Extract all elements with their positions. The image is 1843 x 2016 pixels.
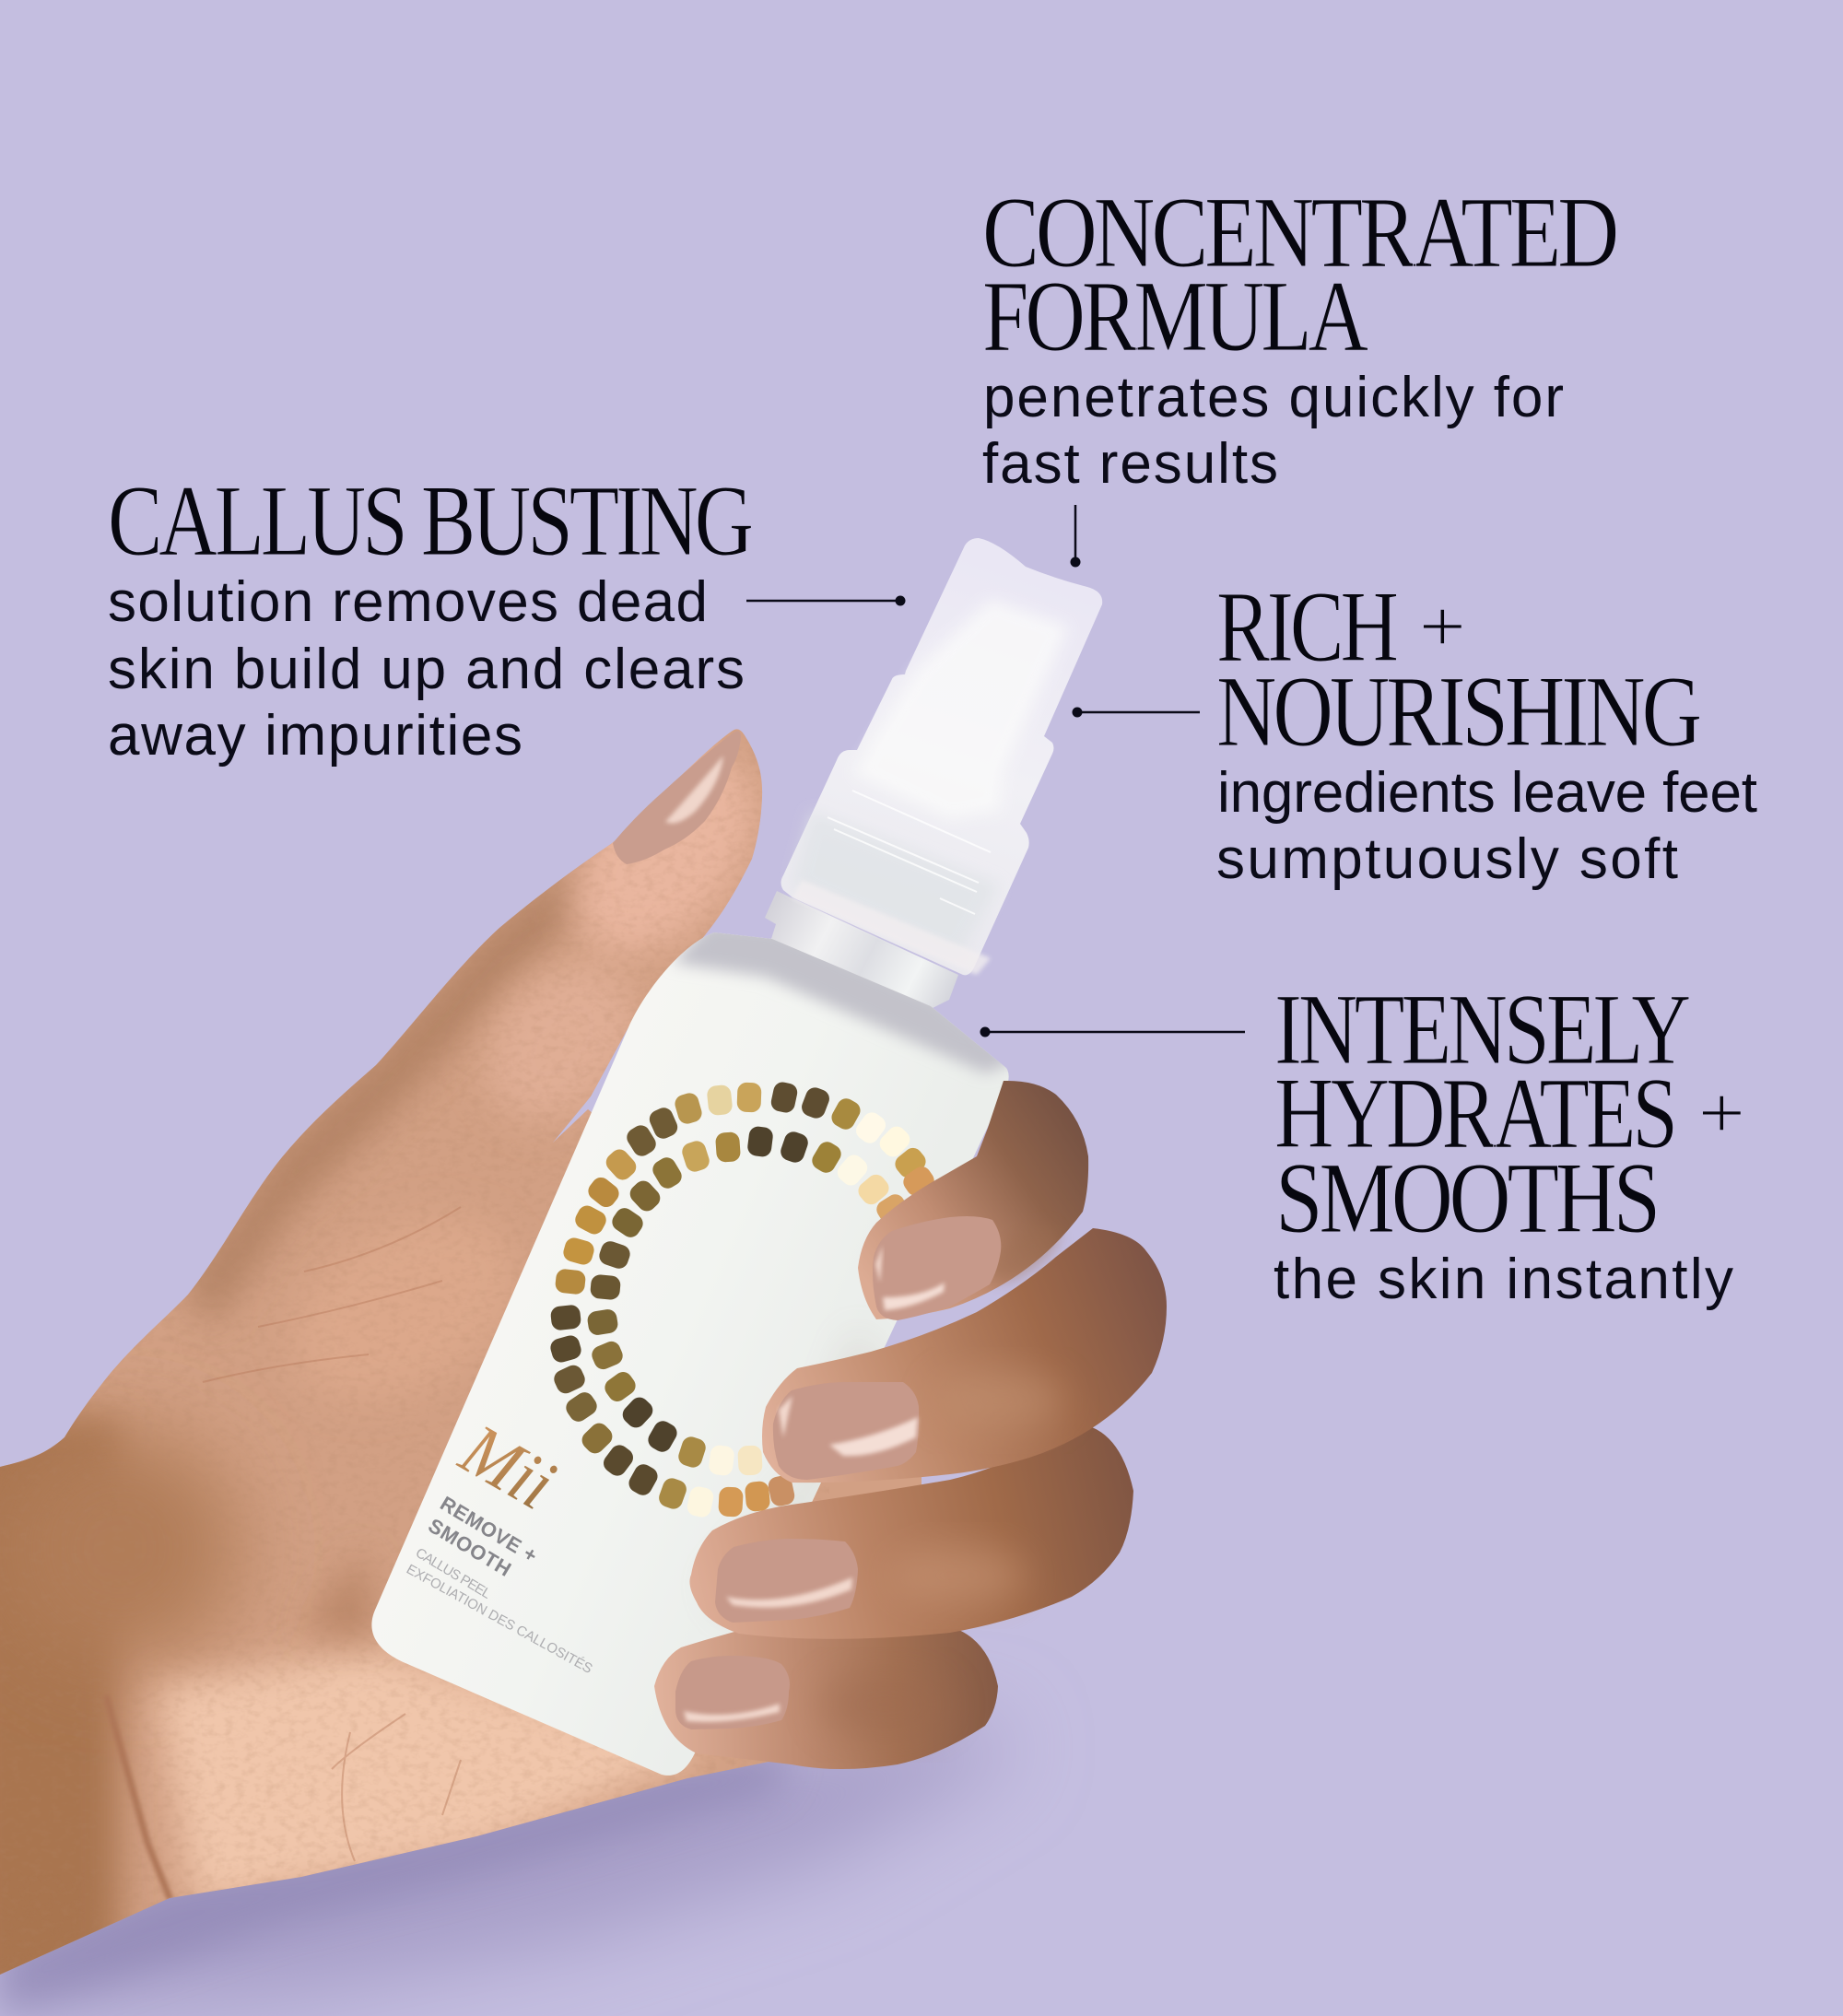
description: fast results bbox=[982, 432, 1278, 496]
description bbox=[108, 570, 745, 768]
heading: INTENSELY bbox=[1274, 973, 1689, 1085]
brand logo: Mii bbox=[447, 1409, 569, 1526]
heading: FORMULA bbox=[982, 260, 1368, 372]
description: ingredients leave feet bbox=[1217, 761, 1757, 825]
description: skin build up and clears bbox=[108, 638, 745, 701]
nail bbox=[675, 1656, 790, 1729]
heading: + bbox=[1419, 587, 1462, 668]
callout: callus busting bbox=[108, 464, 905, 768]
heading: + bbox=[1698, 1073, 1742, 1155]
description: solution removes dead bbox=[108, 570, 708, 634]
product name: REMOVE + bbox=[436, 1492, 541, 1567]
product descriptor: EXFOLIATION DES CALLOSITÉS bbox=[404, 1562, 595, 1677]
callout: concentrated formula bbox=[982, 176, 1616, 568]
nail bbox=[873, 1216, 1001, 1320]
heading: HYDRATES bbox=[1274, 1057, 1674, 1169]
heading: CALLUS BUSTING bbox=[108, 464, 751, 577]
nail bbox=[773, 1382, 919, 1480]
soft drop shadow under hand bbox=[0, 1723, 1014, 2016]
heading bbox=[1216, 570, 1699, 768]
heading: RICH bbox=[1216, 570, 1397, 683]
nail bbox=[715, 1539, 858, 1623]
product: bottle bbox=[371, 921, 1018, 1776]
description: the skin instantly bbox=[1274, 1248, 1733, 1311]
heading bbox=[1274, 973, 1742, 1254]
product descriptor: CALLUS PEEL bbox=[413, 1545, 494, 1602]
leader line bbox=[1071, 505, 1080, 568]
heading: CONCENTRATED bbox=[982, 176, 1616, 288]
product name: SMOOTH bbox=[424, 1514, 515, 1581]
pump neck bbox=[765, 891, 958, 1009]
callout: intensely hydrates and smooths bbox=[980, 973, 1742, 1311]
index finger bbox=[858, 1081, 1088, 1320]
pump translucent cap bbox=[781, 538, 1102, 975]
gold C ring of dots bbox=[548, 1081, 938, 1518]
description: penetrates quickly for bbox=[983, 366, 1564, 429]
leader line bbox=[746, 595, 905, 606]
little finger bbox=[654, 1625, 998, 1769]
description bbox=[982, 366, 1564, 496]
callout: rich and nourishing bbox=[1073, 570, 1757, 891]
heading: NOURISHING bbox=[1216, 655, 1699, 768]
hand: palm and thumb bbox=[0, 716, 922, 2016]
heading: SMOOTHS bbox=[1275, 1142, 1657, 1254]
middle finger bbox=[762, 1228, 1167, 1483]
leader line bbox=[1073, 708, 1200, 717]
thumb nail bbox=[613, 731, 741, 864]
description: sumptuously soft bbox=[1216, 827, 1678, 891]
leader line bbox=[980, 1026, 1245, 1037]
ring finger bbox=[689, 1424, 1133, 1639]
description bbox=[1216, 761, 1757, 891]
description: away impurities bbox=[108, 704, 522, 768]
heading bbox=[982, 176, 1616, 372]
gap between thumb and palm bbox=[590, 1029, 628, 1108]
product: spray pump bbox=[765, 538, 1102, 1009]
